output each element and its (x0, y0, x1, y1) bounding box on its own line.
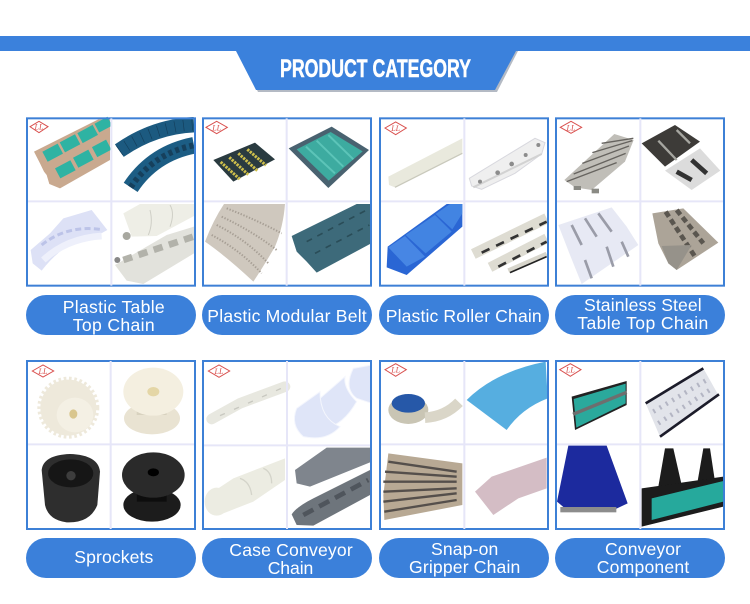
panel: plastic table top chain (27, 117, 195, 286)
logo: LL (34, 123, 44, 132)
white sprocket (39, 378, 98, 437)
black sprocket (42, 454, 100, 522)
black belt (213, 143, 275, 182)
tan chain (34, 117, 112, 188)
frame (380, 118, 548, 286)
label: Plastic Table Top Chain (26, 295, 196, 335)
logo (32, 365, 54, 377)
label: Case Conveyor Chain: Chain (268, 558, 313, 578)
label: Plastic Table Top Chain: Top Chain (73, 315, 155, 335)
logo (208, 365, 230, 377)
frame (203, 361, 371, 529)
frame (556, 361, 724, 529)
curved steel chain (652, 208, 718, 270)
label: Stainless Steel Table Top Chain: Table Top Chain (577, 313, 708, 333)
logo: LL (565, 366, 575, 375)
blue curved chains (119, 125, 194, 187)
logo: LL (214, 367, 224, 376)
slate belt (292, 204, 370, 273)
panel: conveyor component (556, 361, 724, 529)
label: Case Conveyor Chain: Case Conveyor (229, 540, 353, 560)
title ribbon (236, 51, 518, 92)
towers with teal bar (642, 448, 723, 527)
white plates (558, 207, 638, 284)
logo (206, 121, 227, 134)
finger chain (383, 453, 462, 520)
lavender discs (294, 365, 372, 438)
ball chain (646, 368, 719, 437)
panel: snap-on gripper chain (380, 361, 548, 529)
frame (27, 118, 195, 286)
white roller (469, 138, 545, 189)
label: Conveyor Component (555, 538, 725, 578)
white spool (123, 368, 183, 434)
logo (385, 122, 406, 135)
label: Snap-on Gripper Chain: Snap-on (431, 539, 498, 559)
label: Conveyor Component: Component (597, 557, 689, 577)
rolled gripper chain (388, 394, 459, 424)
steel plates (564, 134, 634, 193)
logo: LL (211, 123, 222, 132)
label: Snap-on Gripper Chain: Gripper Chain (409, 557, 520, 577)
label: Sprockets: Sprockets (74, 547, 154, 567)
logo (385, 364, 406, 376)
teal belt (289, 127, 369, 188)
label: Plastic Roller Chain (379, 295, 549, 335)
dark and light plates (642, 125, 720, 190)
steel-link chains (473, 218, 547, 273)
pink plates (475, 458, 547, 515)
frame (203, 118, 371, 286)
white chains (114, 204, 194, 284)
label: Snap-on Gripper Chain (379, 538, 549, 578)
white link chain (212, 387, 285, 419)
label: Sprockets (26, 538, 196, 578)
panel: sprockets (27, 361, 195, 529)
white bar (388, 138, 462, 187)
top banner bar (0, 36, 750, 51)
panel: case conveyor chain (203, 361, 372, 529)
label: Plastic Modular Belt (202, 295, 372, 335)
logo: LL (390, 124, 401, 133)
gray chains (292, 448, 370, 526)
frame (556, 118, 724, 286)
frame (27, 361, 195, 529)
panel: plastic modular belt (203, 118, 371, 286)
black spool (122, 452, 185, 522)
logo (560, 364, 581, 376)
frame (380, 361, 548, 529)
label: Stainless Steel Table Top Chain: Stainless Steel (584, 295, 702, 315)
label: Case Conveyor Chain (202, 538, 372, 578)
blue block (557, 446, 628, 512)
blue fan chain (467, 362, 548, 430)
white lobe chain (205, 458, 285, 516)
beige belt (205, 204, 285, 282)
panel: plastic roller chain (380, 118, 548, 286)
blue block chain (387, 204, 462, 275)
label: Plastic Table Top Chain: Plastic Table (63, 297, 165, 317)
label: Conveyor Component: Conveyor (605, 539, 681, 559)
teal wear strip (572, 381, 627, 430)
label: Plastic Modular Belt: Plastic Modular Belt (207, 306, 367, 326)
logo (560, 121, 582, 133)
label: Plastic Roller Chain: Plastic Roller Chain (386, 306, 542, 326)
panel: stainless steel table top chain (556, 118, 724, 286)
logo: LL (38, 367, 48, 376)
label: Stainless Steel Table Top Chain (555, 295, 725, 335)
logo: LL (390, 366, 401, 375)
title: PRODUCT CATEGORY (280, 55, 471, 83)
logo (30, 121, 48, 133)
logo: LL (566, 123, 576, 132)
clear curved chain (31, 210, 107, 271)
